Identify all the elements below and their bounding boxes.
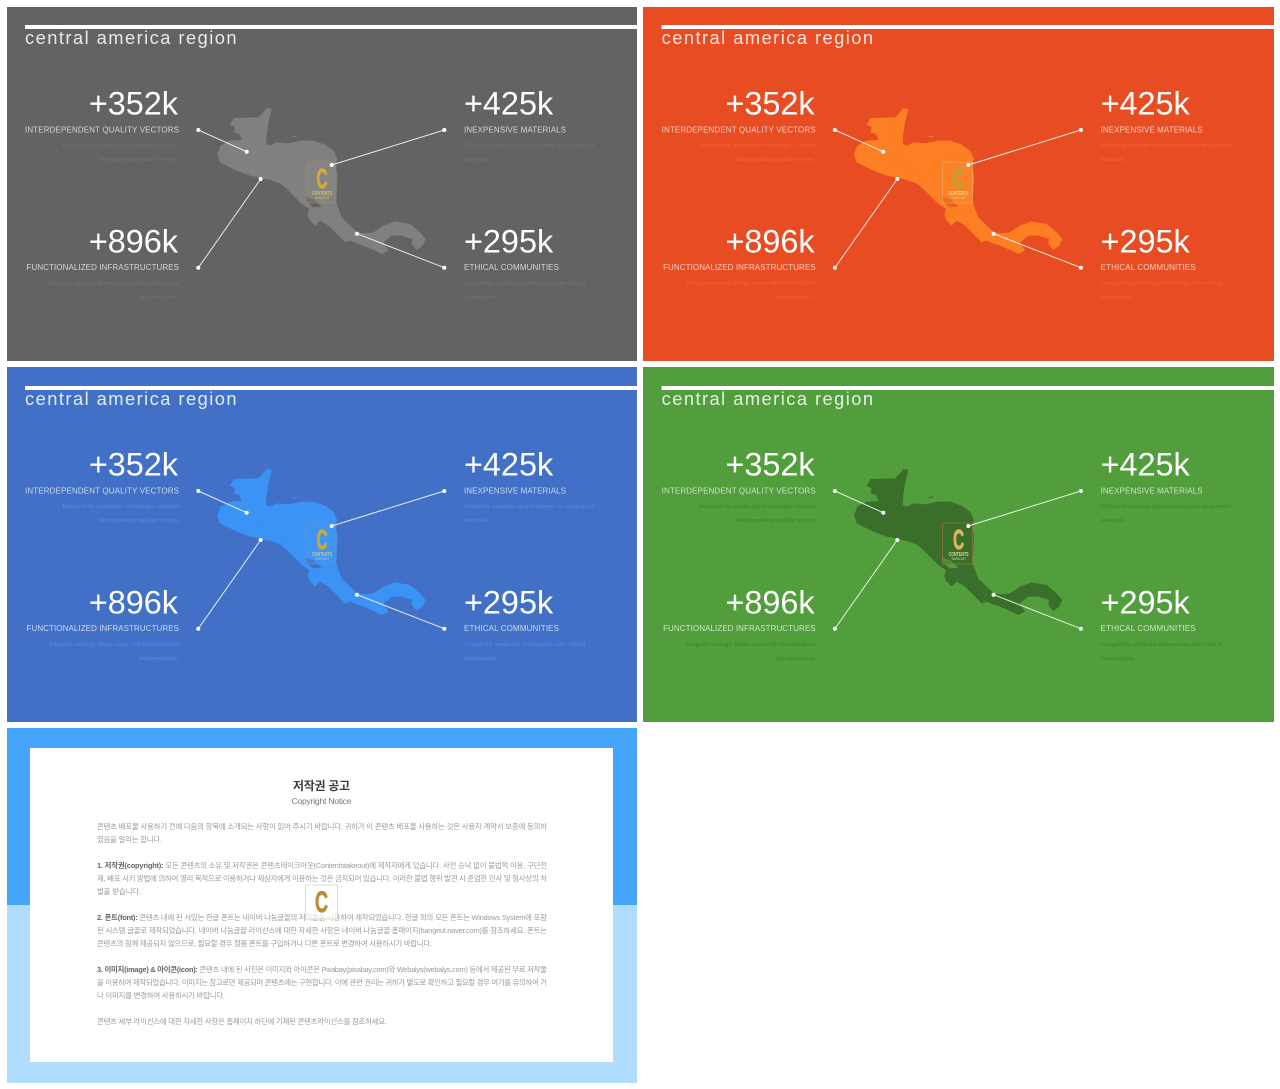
map: central america [854, 469, 1062, 615]
stat: 425k: +425k [1101, 85, 1191, 121]
stat: 425k: materials. [1101, 518, 1127, 524]
notice body text: 콘텐츠 배포물 사용하기 전에 다음의 항목에 소개되는 사항이 읽어 주시기 바랍니다. 귀하가 이 콘텐츠 배포물 사용하는 것은 사용자 계약서 보증에 동의하 [97, 822, 547, 831]
stat: 425k [464, 446, 595, 524]
stat: 352k: Interactively productize technologies whereas [699, 143, 816, 149]
notice subtitle: Copyright Notice [292, 796, 352, 806]
stat: 425k: +425k [1101, 446, 1191, 482]
notice body text: 벌을 받습니다. [97, 887, 141, 896]
stat: 295k [1101, 584, 1222, 662]
map: central america [217, 469, 426, 615]
stat: 352k: INTERDEPENDENT QUALITY VECTORS [25, 125, 179, 134]
stat: 352k: Interactively productize technologies whereas [62, 504, 180, 510]
stat: 352k: +352k [89, 85, 179, 121]
stat: 352k [25, 446, 180, 524]
stat: 352k: interdependent quality vectors. [99, 518, 180, 524]
stat: 352k: interdependent quality vectors. [99, 157, 180, 163]
stat: 295k: Completely synthesize information after ethical [464, 281, 586, 287]
stat: 896k: Integrate strategic theme areas with functionalized [686, 281, 816, 287]
notice body text: 1. 저작권(copyright): 모든 콘텐츠의 소유 및 저작권은 콘텐츠테이크아웃(Contentstakeout)에 제작자에게 있습니다. 사전 승낙 없이 불법적 이용, 구단전 [97, 861, 547, 870]
logo: contents: CONTENTS [949, 552, 969, 558]
stat: 352k: INTERDEPENDENT QUALITY VECTORS [25, 486, 179, 495]
stat: 425k [464, 85, 595, 163]
stat: 896k: FUNCTIONALIZED INFRASTRUCTURES [26, 263, 179, 272]
stat: 295k: ETHICAL COMMUNITIES [1101, 624, 1196, 633]
stat: 896k: FUNCTIONALIZED INFRASTRUCTURES [663, 263, 816, 272]
logo: contents: C [953, 163, 964, 194]
connector lines [196, 489, 446, 631]
stat: 896k: infrastructures. [776, 295, 816, 301]
stat: 896k [26, 584, 180, 662]
stat: 425k: INEXPENSIVE MATERIALS [1101, 125, 1203, 134]
stat: 352k [662, 85, 816, 163]
stat: 295k: communities. [464, 295, 499, 301]
stat: 295k: +295k [464, 584, 554, 620]
notice body text: 된 시스템 글꼴로 제작되었습니다. 네이버 나눔글꼴 라이선스에 대한 자세한 사항은 네이버 나눔글꼴 홈페이지(hangeul.naver.com)를 참조하세요. 폰트는 [97, 926, 547, 935]
stat: 352k [25, 85, 180, 163]
heading: central america region [662, 27, 873, 48]
stat: 896k: infrastructures. [139, 656, 179, 662]
stat: 352k: +352k [725, 85, 815, 121]
stat: 896k [663, 584, 816, 662]
stat: 896k: +896k [725, 223, 815, 259]
map: central america [854, 108, 1062, 254]
stat: 295k: ETHICAL COMMUNITIES [464, 624, 559, 633]
stat: 295k: communities. [1101, 656, 1135, 662]
stat: 425k [1101, 446, 1231, 524]
stat: 352k: interdependent quality vectors. [736, 157, 816, 163]
panel: orange slide [643, 7, 1274, 361]
notice body text: 제, 배포 시키 방법에 의하여 영리 목적으로 이용하거나 제삼자에게 이용하는 것은 금지되어 있습니다. 이러한 불법 행위 발견 시 준엄한 민사 및 형사상의 처 [97, 874, 547, 883]
stat: 425k: +425k [464, 446, 554, 482]
stat: 295k: communities. [1101, 295, 1135, 301]
stat: 425k: INEXPENSIVE MATERIALS [464, 125, 566, 134]
notice body text: 콘텐츠의 함께 제공되지 않으므로, 필요할 경우 정품 폰트를 구입하거나 다른 폰트로 변경하여 사용하시기 바랍니다. [97, 939, 432, 948]
stat: 896k: Integrate strategic theme areas with functionalized [49, 642, 180, 648]
stat: 425k: INEXPENSIVE MATERIALS [464, 486, 566, 495]
stat: 425k: materials. [464, 157, 490, 163]
stat: 295k: Completely synthesize information after ethical [1101, 642, 1222, 648]
stat: 295k [464, 223, 586, 301]
heading: central america region [662, 388, 873, 409]
stat: 295k: +295k [1101, 223, 1191, 259]
notice body text: 2. 폰트(font): 콘텐츠 내에 된 서있는 한글 폰트는 네이버 나눔글꼴의 저작물을 사용하여 제작되었습니다. 한글 외의 모든 폰트는 Windows System에 포함 [97, 913, 547, 922]
logo: contents [943, 523, 973, 564]
notice body text [97, 822, 547, 1026]
stat: 425k: materials. [464, 518, 490, 524]
stat: 896k: FUNCTIONALIZED INFRASTRUCTURES [26, 624, 179, 633]
stat: 352k: Interactively productize technologies whereas [62, 143, 180, 149]
notice body text: 콘텐츠 세부 라이선스에 대한 자세한 사항은 홈페이지 하단에 기재된 콘텐츠라이선스를 참조하세요. [97, 1017, 387, 1026]
logo: watermark: C [315, 886, 328, 919]
stat: 295k: +295k [1101, 584, 1191, 620]
logo: contents: TAKEOUT [315, 557, 329, 561]
logo: contents [306, 523, 336, 564]
panel: gray slide [7, 7, 637, 361]
logo: contents: TAKEOUT [951, 557, 966, 561]
logo: contents: CONTENTS [312, 191, 332, 197]
logo: watermark [306, 885, 338, 919]
connector lines [833, 128, 1083, 270]
notice title: 저작권 공고 [293, 778, 350, 793]
connector lines [833, 489, 1083, 631]
logo: contents: C [316, 163, 328, 194]
stat: 352k: INTERDEPENDENT QUALITY VECTORS [662, 125, 816, 134]
logo: contents: CONTENTS [949, 191, 969, 197]
stat: 295k: ETHICAL COMMUNITIES [1101, 263, 1196, 272]
stat: 295k: +295k [464, 223, 554, 259]
heading: central america region [25, 388, 236, 409]
stat: 896k: +896k [89, 584, 179, 620]
stat: 896k [663, 223, 816, 301]
stat: 425k: Efficiently innovate infrastructures via inexpensive [1101, 143, 1231, 149]
notice body text: 을 이용하여 제작되었습니다. 이미지는 참고로만 제공되며 콘텐츠에는 구현합니다. 이에 관련 권리는 귀하가 별도로 확인하고 필요할 경우 여기를 유의하여 거 [97, 978, 547, 987]
stat: 425k [1101, 85, 1231, 163]
heading: central america region [25, 27, 236, 48]
connector lines [196, 128, 446, 270]
stat: 425k: Efficiently innovate infrastructures via inexpensive [464, 504, 595, 510]
stat: 425k: Efficiently innovate infrastructures via inexpensive [1101, 504, 1231, 510]
logo: contents: TAKEOUT [951, 196, 966, 200]
stat: 896k: +896k [725, 584, 815, 620]
stat: 352k: interdependent quality vectors. [736, 518, 816, 524]
logo: contents [306, 162, 336, 203]
logo: contents: TAKEOUT [315, 196, 329, 200]
stat: 352k: +352k [89, 446, 179, 482]
map: central america [217, 108, 426, 254]
notice body text: 나 이미지를 변경하여 사용하시기 바랍니다. [97, 991, 225, 1000]
stat: 896k: FUNCTIONALIZED INFRASTRUCTURES [663, 624, 816, 633]
stat: 896k: infrastructures. [776, 656, 816, 662]
stat: 295k: Completely synthesize information after ethical [464, 642, 586, 648]
logo: contents: C [953, 524, 964, 555]
panel: blue slide [7, 367, 637, 722]
stat: 425k: INEXPENSIVE MATERIALS [1101, 486, 1203, 495]
stat: 425k: materials. [1101, 157, 1127, 163]
stat: 352k: INTERDEPENDENT QUALITY VECTORS [662, 486, 816, 495]
stat: 896k: Integrate strategic theme areas with functionalized [686, 642, 816, 648]
stat: 896k: infrastructures. [139, 295, 179, 301]
stat: 425k: +425k [464, 85, 554, 121]
logo: contents: CONTENTS [312, 552, 332, 558]
panel: green slide [643, 367, 1274, 722]
stat: 896k: Integrate strategic theme areas with functionalized [49, 281, 180, 287]
stat: 352k: Interactively productize technologies whereas [699, 504, 816, 510]
notice body text: 였음을 알리는 합니다. [97, 835, 162, 844]
stat: 295k: Completely synthesize information after ethical [1101, 281, 1222, 287]
stat: 295k: communities. [464, 656, 499, 662]
logo: contents: C [316, 524, 328, 555]
stat: 352k: +352k [725, 446, 815, 482]
stat: 295k: ETHICAL COMMUNITIES [464, 263, 559, 272]
logo: contents [943, 162, 973, 203]
stat: 896k: +896k [89, 223, 179, 259]
notice body text: 3. 이미지(image) & 아이콘(icon): 콘텐츠 내에 된 사진은 이미지와 아이콘은 Pixabay(pixabay.com)와 Webalys(webalys.com) 등에서 제공된 무료 저작물 [97, 965, 547, 974]
stat: 352k [662, 446, 816, 524]
stat: 896k [26, 223, 180, 301]
stat: 295k [1101, 223, 1222, 301]
stat: 425k: Efficiently innovate infrastructures via inexpensive [464, 143, 595, 149]
stat: 295k [464, 584, 586, 662]
